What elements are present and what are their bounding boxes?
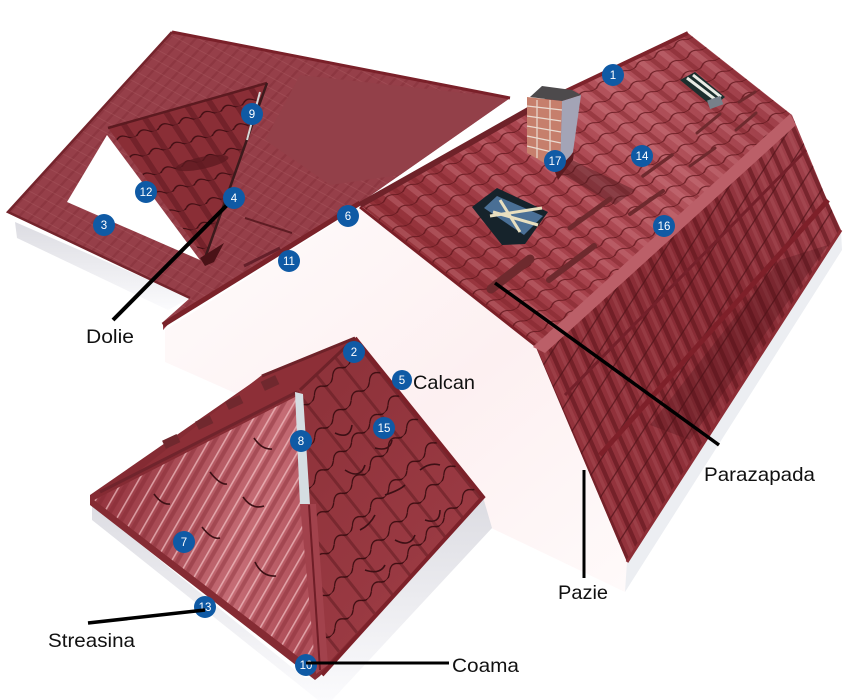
roof window, upper	[680, 72, 725, 109]
badge 16	[653, 215, 675, 237]
label: Pazie: Pazie	[558, 582, 608, 604]
badge 5	[392, 370, 412, 390]
callout line: Dolie	[113, 198, 234, 320]
badge 14	[631, 145, 653, 167]
label: Parazapada: Parazapada	[704, 464, 815, 486]
badge 3: 3	[101, 220, 107, 232]
snow guards	[491, 92, 756, 289]
badge 7	[173, 531, 195, 553]
badge 17	[544, 150, 566, 172]
badge 15: 15	[378, 423, 390, 435]
callout line: Streasina	[88, 610, 205, 623]
dormer roof with dark tiles	[108, 83, 267, 266]
badge 8	[290, 430, 312, 452]
badge 10	[295, 654, 317, 676]
badge 2	[343, 341, 365, 363]
badge 8: 8	[298, 436, 304, 448]
badge 13	[194, 596, 216, 618]
badge 1	[602, 64, 624, 86]
main roof facet	[360, 33, 792, 345]
hook details on hip roof	[154, 425, 440, 576]
badge 17: 17	[549, 156, 561, 168]
badge 11: 11	[283, 256, 295, 268]
badge 9	[241, 103, 263, 125]
badge 15	[373, 417, 395, 439]
callout line: Pazie	[582, 470, 586, 578]
house walls	[15, 207, 842, 592]
badge 6	[337, 205, 359, 227]
left wing roof	[8, 32, 510, 330]
callout line: Parazapada	[495, 283, 719, 445]
callout line: Coama	[306, 662, 449, 664]
badge 12: 12	[140, 187, 152, 199]
badge 4	[223, 187, 245, 209]
badge 11	[278, 250, 300, 272]
chimney	[527, 86, 581, 180]
badge 9: 9	[249, 109, 255, 121]
label: Dolie: Dolie	[86, 326, 134, 348]
badge 7: 7	[181, 537, 187, 549]
badge 5: 5	[399, 375, 405, 387]
badge 10: 10	[300, 660, 312, 672]
label: Streasina: Streasina	[48, 630, 135, 652]
lower main roof slope	[533, 114, 841, 562]
badge 2: 2	[351, 347, 357, 359]
badge 4: 4	[231, 193, 238, 205]
badge 6: 6	[345, 211, 351, 223]
roof window, lower	[472, 188, 548, 245]
badge 1: 1	[610, 70, 616, 82]
badge 13: 13	[199, 602, 211, 614]
badge 3	[93, 214, 115, 236]
badge 12	[135, 181, 157, 203]
label: Calcan: Calcan	[413, 372, 475, 394]
front hip roof	[90, 338, 492, 700]
badge 14: 14	[636, 151, 649, 163]
badge 16: 16	[658, 221, 670, 233]
label: Coama: Coama	[452, 655, 519, 677]
